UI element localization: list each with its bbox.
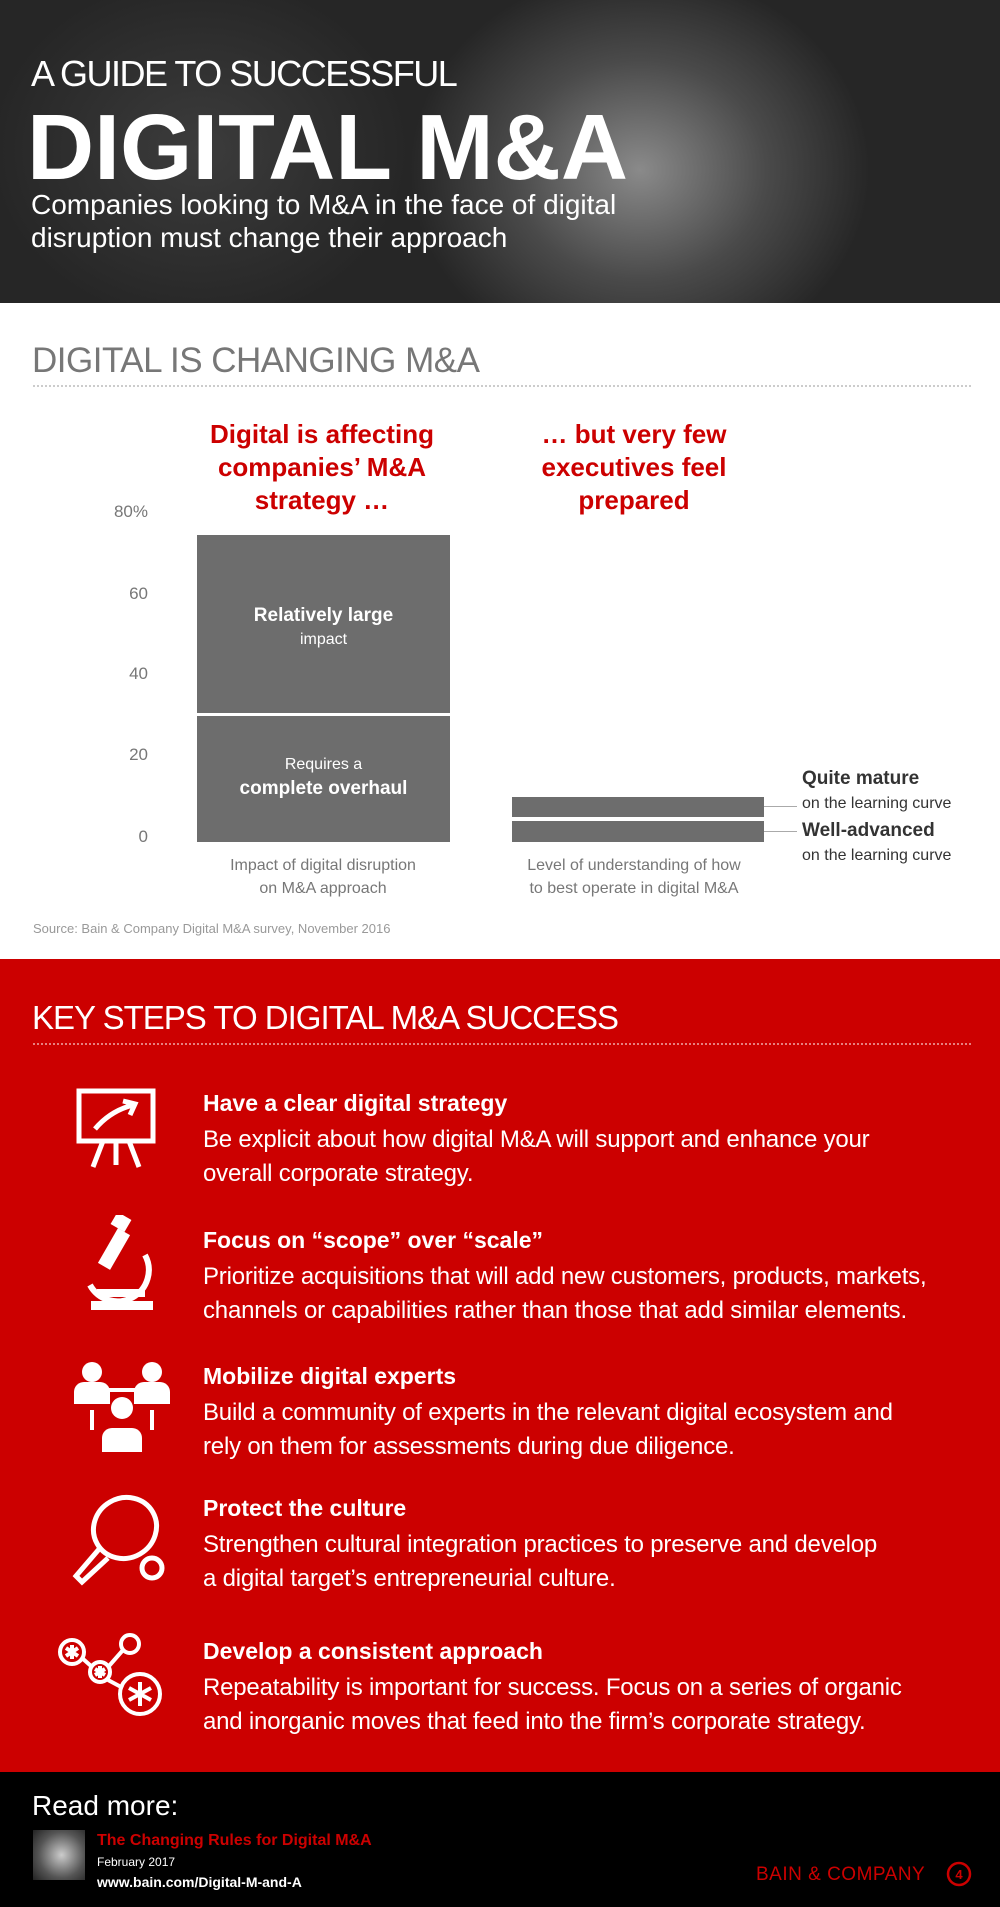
step 4: Strengthen cultural integration practices to preserve and develop xyxy=(203,1531,877,1558)
subtitle: disruption must change their approach xyxy=(31,222,507,253)
heading: but very few xyxy=(541,419,726,515)
icon: microscope xyxy=(87,1215,153,1310)
heading: digital is affecting: Digital is affecting xyxy=(210,419,434,449)
icon: connected nodes xyxy=(58,1633,162,1716)
subtitle xyxy=(31,189,616,253)
label: quite mature xyxy=(802,768,951,812)
footer xyxy=(0,1772,1000,1907)
step 2: Focus on “scope” over “scale” xyxy=(203,1227,543,1253)
header: dark photo banner xyxy=(0,0,1000,303)
bar segment: relatively large xyxy=(197,535,450,713)
footer: 4 xyxy=(955,1867,963,1882)
step 3: Mobilize digital experts xyxy=(203,1363,456,1389)
key steps heading: KEY STEPS TO DIGITAL M&A SUCCESS xyxy=(32,999,618,1036)
label: quite mature: on the learning curve xyxy=(802,795,951,812)
step 4: a digital target’s entrepreneurial culture. xyxy=(203,1565,616,1592)
step 5: Develop a consistent approach xyxy=(203,1638,543,1664)
heading: digital is affecting xyxy=(210,419,434,515)
step 3: Build a community of experts in the relevant digital ecosystem and xyxy=(203,1399,893,1426)
step 4: Protect the culture xyxy=(203,1495,406,1521)
step 2 xyxy=(203,1227,926,1324)
step 5: Repeatability is important for success. Focus on a series of organic xyxy=(203,1674,902,1701)
bar segment: complete overhaul: complete overhaul xyxy=(240,778,407,799)
logo: bain & company: BAIN & COMPANY xyxy=(756,1864,925,1885)
bar chart 1: impact xyxy=(197,535,450,842)
section heading: digital is changing: DIGITAL IS CHANGING M&A xyxy=(32,341,479,380)
step 1: Have a clear digital strategy xyxy=(203,1090,507,1116)
caption 2: Level of understanding of how xyxy=(527,857,741,874)
caption 2: to best operate in digital M&A xyxy=(529,880,738,897)
icon: presentation board xyxy=(76,1088,156,1168)
heading: but very few: prepared xyxy=(578,485,690,515)
panel: key steps xyxy=(0,959,1000,1772)
icon: ping pong paddle xyxy=(72,1494,164,1586)
step 5 xyxy=(203,1638,902,1735)
heading: but very few: … but very few xyxy=(542,419,726,449)
title main: DIGITAL M&A xyxy=(27,95,628,199)
report link: The Changing Rules for Digital M&A xyxy=(97,1832,372,1849)
caption 1 xyxy=(230,857,416,897)
report link xyxy=(97,1832,372,1890)
step 1: overall corporate strategy. xyxy=(203,1160,473,1187)
step 4 xyxy=(203,1495,877,1592)
heading: but very few: executives feel xyxy=(541,452,726,482)
heading: digital is affecting: strategy … xyxy=(255,485,389,515)
logo: bain & company xyxy=(756,1862,972,1886)
y axis labels: 40 xyxy=(129,664,148,683)
caption 2 xyxy=(527,857,741,897)
step 3: rely on them for assessments during due diligence. xyxy=(203,1433,735,1460)
report link: www.bain.com/Digital-M-and-A xyxy=(97,1874,302,1890)
label: quite mature: Quite mature xyxy=(802,768,919,789)
bar chart 2: understanding xyxy=(512,797,797,842)
subtitle: Companies looking to M&A in the face of digital xyxy=(31,189,616,220)
y axis labels: 20 xyxy=(129,745,148,764)
bar segment: complete overhaul: Requires a xyxy=(285,756,362,773)
read more heading: Read more: xyxy=(32,1790,178,1821)
y axis labels: 80% xyxy=(114,502,148,521)
step 3 xyxy=(203,1363,893,1460)
step 1 xyxy=(203,1090,870,1187)
caption 1: Impact of digital disruption xyxy=(230,857,416,874)
label: well-advanced: on the learning curve xyxy=(802,847,951,864)
report link: February 2017 xyxy=(97,1855,175,1869)
title line 1: A GUIDE TO SUCCESSFUL xyxy=(31,53,456,94)
step 2: Prioritize acquisitions that will add new customers, products, markets, xyxy=(203,1263,926,1290)
bar segment: complete overhaul xyxy=(197,716,450,842)
step 5: and inorganic moves that feed into the firm’s corporate strategy. xyxy=(203,1708,865,1735)
y axis labels xyxy=(114,502,148,846)
icon: people xyxy=(74,1362,170,1452)
y axis labels: 60 xyxy=(129,584,148,603)
step 2: channels or capabilities rather than those that add similar elements. xyxy=(203,1297,907,1324)
bar segment: relatively large: impact xyxy=(300,631,347,648)
source: Source: Bain & Company Digital M&A survey, November 2016 xyxy=(33,921,390,936)
caption 1: on M&A approach xyxy=(259,880,387,897)
y axis labels: 0 xyxy=(139,827,148,846)
label: well-advanced xyxy=(802,820,951,864)
heading: digital is affecting: companies’ M&A xyxy=(218,452,426,482)
label: well-advanced: Well-advanced xyxy=(802,820,935,841)
bar segment: relatively large: Relatively large xyxy=(254,605,393,626)
thumbnail xyxy=(33,1830,85,1880)
step 1: Be explicit about how digital M&A will support and enhance your xyxy=(203,1126,869,1153)
